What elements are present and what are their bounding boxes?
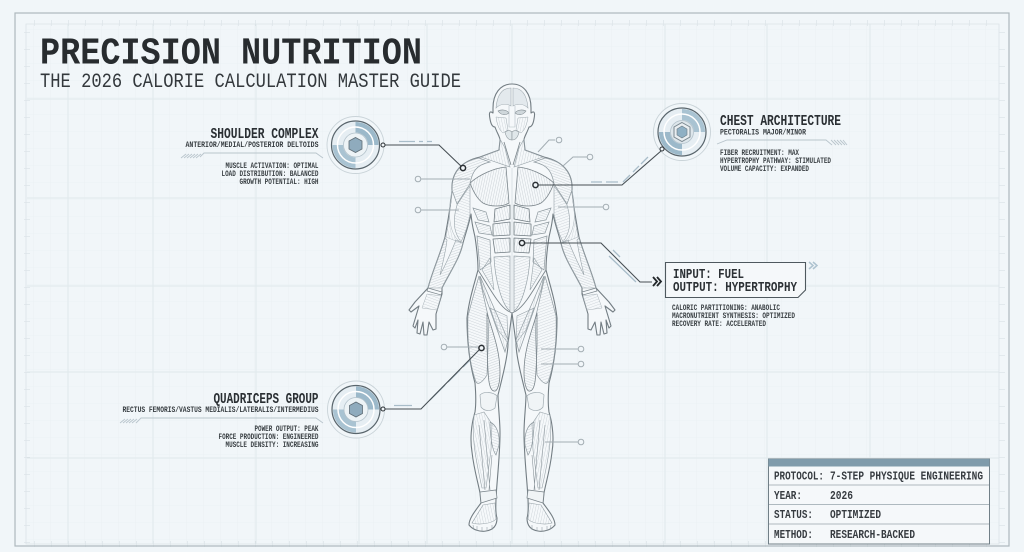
- input line: INPUT: FUEL: [673, 268, 744, 283]
- title: PRECISION NUTRITION: [40, 32, 422, 76]
- row: status: OPTIMIZED: [830, 509, 881, 522]
- input output box: [666, 262, 806, 298]
- panel: shoulder complex: [181, 116, 466, 187]
- arrow: pale chevrons: [809, 262, 817, 269]
- row: year: 2026: [830, 490, 853, 503]
- panel: chest architecture: [533, 104, 847, 188]
- chest divider: [717, 140, 847, 145]
- quadriceps subheading: RECTUS FEMORIS/VASTUS MEDIALIS/LATERALIS/INTERMEDIUS: [122, 405, 318, 415]
- subtitle: THE 2026 CALORIE CALCULATION MASTER GUIDE: [40, 71, 461, 94]
- row: year: [774, 490, 853, 503]
- shoulder heading: SHOULDER COMPLEX: [210, 127, 319, 143]
- table header bar: [768, 459, 990, 466]
- panel: protocol table: [768, 459, 990, 544]
- row: method: RESEARCH-BACKED: [830, 529, 915, 542]
- secondary callout markers: [415, 137, 609, 445]
- callout details: MACRONUTRIENT SYNTHESIS: OPTIMIZED: [672, 313, 795, 321]
- row: status: STATUS:: [774, 509, 813, 522]
- row: method: [774, 529, 915, 542]
- quadriceps target icon: [328, 381, 384, 438]
- quadriceps details: [218, 426, 319, 450]
- shoulder subheading: ANTERIOR/MEDIAL/POSTERIOR DELTOIDS: [186, 140, 318, 150]
- panel: quadriceps group: [120, 345, 484, 450]
- callout details: [672, 305, 795, 329]
- table body: [768, 459, 990, 544]
- quadriceps details: FORCE PRODUCTION: ENGINEERED: [218, 434, 319, 442]
- chest connector: [533, 147, 664, 188]
- quadriceps heading: QUADRICEPS GROUP: [214, 392, 319, 408]
- chest details: HYPERTROPHY PATHWAY: STIMULATED: [720, 158, 831, 166]
- callout connector: [519, 240, 652, 282]
- quadriceps details: POWER OUTPUT: PEAK: [254, 426, 319, 434]
- shoulder details: [222, 163, 319, 187]
- arrow: dark chevrons: [653, 277, 661, 286]
- quadriceps divider: [120, 418, 323, 423]
- row: year: YEAR:: [774, 490, 802, 503]
- shoulder details: LOAD DISTRIBUTION: BALANCED: [222, 171, 319, 179]
- row: protocol: PROTOCOL:: [774, 470, 824, 484]
- shoulder details: GROWTH POTENTIAL: HIGH: [240, 179, 319, 187]
- row: protocol: [774, 470, 983, 484]
- quadriceps connector: [381, 345, 484, 411]
- row: status: [774, 509, 881, 522]
- shoulder connector: [381, 142, 466, 171]
- panel: input output callout: [519, 240, 817, 329]
- callout details: RECOVERY RATE: ACCELERATED: [672, 321, 766, 329]
- row: protocol: 7-STEP PHYSIQUE ENGINEERING: [830, 470, 983, 484]
- callout details: CALORIC PARTITIONING: ANABOLIC: [672, 305, 780, 313]
- output line: OUTPUT: HYPERTROPHY: [673, 281, 798, 296]
- row: method: METHOD:: [774, 529, 813, 542]
- chest subheading: PECTORALIS MAJOR/MINOR: [720, 128, 807, 138]
- shoulder divider: [181, 153, 323, 158]
- chest details: FIBER RECRUITMENT: MAX: [720, 150, 799, 158]
- shoulder details: MUSCLE ACTIVATION: OPTIMAL: [226, 163, 319, 171]
- chest target icon: [654, 104, 710, 160]
- chest heading: CHEST ARCHITECTURE: [720, 114, 841, 130]
- chest details: VOLUME CAPACITY: EXPANDED: [720, 166, 809, 174]
- chest details: [720, 150, 831, 174]
- anatomical figure: [409, 84, 615, 532]
- quadriceps details: MUSCLE DENSITY: INCREASING: [226, 442, 319, 450]
- shoulder target icon: [327, 116, 384, 174]
